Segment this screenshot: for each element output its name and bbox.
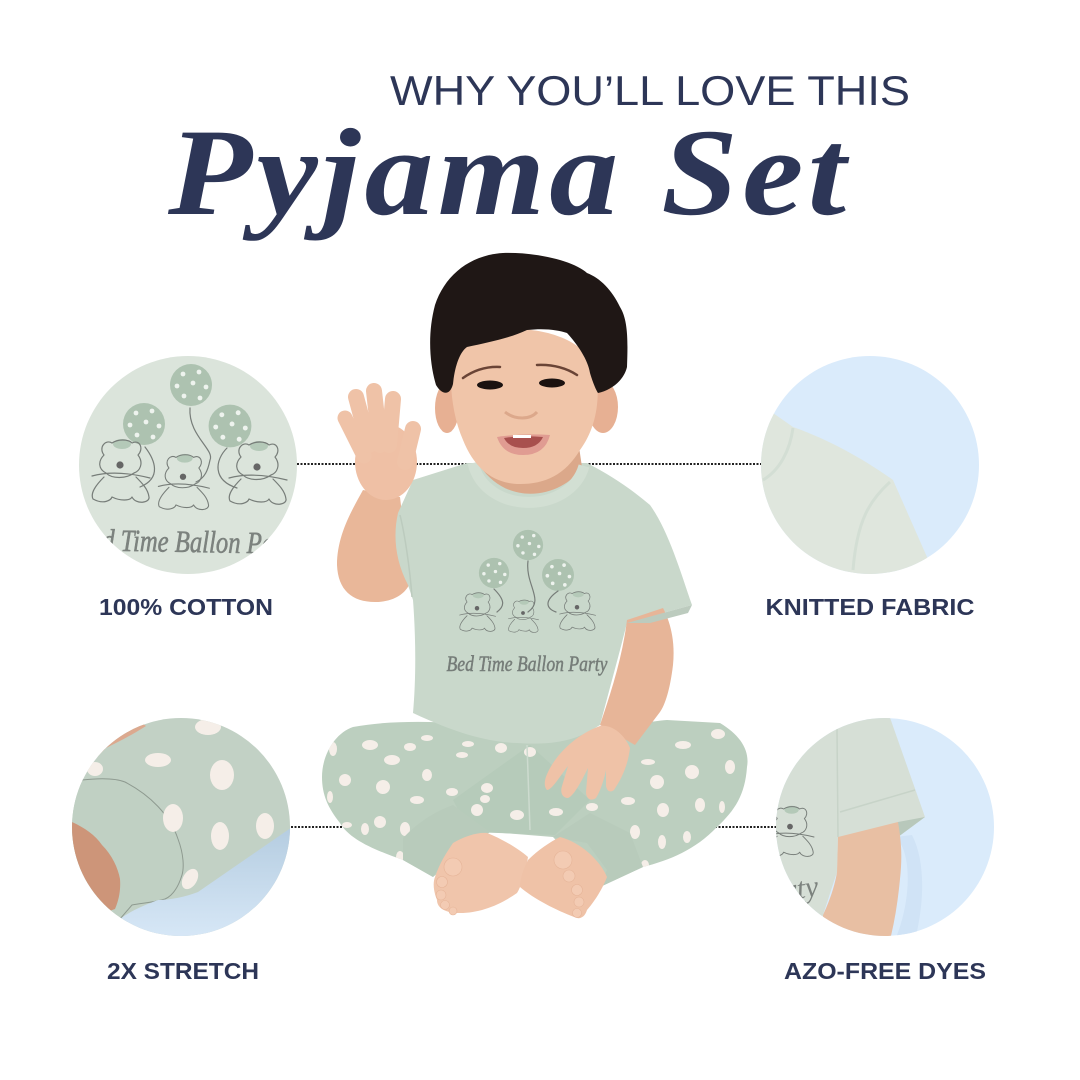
label: KNITTED FABRIC [766,594,974,620]
label: 2X STRETCH [107,958,259,984]
eyebrows [463,365,577,378]
detail photo: shirt shoulder [750,356,979,580]
baby photo illustration [322,253,748,918]
hair [430,253,627,393]
label: 100% COTTON [99,594,273,620]
label: AZO-FREE DYES [784,958,986,984]
eyes [477,378,565,390]
smile [497,434,550,455]
panel: 2x stretch [70,715,295,984]
dotted connector lines [291,464,776,827]
panel: azo-free dyes [768,712,994,984]
t-shirt [395,463,692,744]
neck [478,440,582,494]
detail photo: cotton print [79,356,297,574]
nose [505,412,537,418]
shirt print [446,530,608,676]
panel: knitted fabric [750,356,979,620]
detail photo: cotton print: d Time Ballon Pa [102,523,274,560]
heading: why you'll love this: WHY YOU’LL LOVE THIS [390,67,910,114]
collar [473,463,584,502]
shirt print: Bed Time Ballon Party [446,651,608,676]
face [451,329,598,484]
raised hand [345,391,417,500]
panel: 100% cotton [79,356,297,620]
right arm and hand [545,605,692,800]
ears [435,381,618,433]
detail photo: sleeve: rty [783,870,821,907]
feet [434,833,528,913]
detail photo: cuff [70,715,295,945]
title: Pyjama Set: Pyjama Set [167,104,850,241]
detail photo: sleeve [768,712,994,945]
cuffs [403,805,490,877]
raised arm [337,490,410,602]
baby legs and pants [322,720,748,918]
